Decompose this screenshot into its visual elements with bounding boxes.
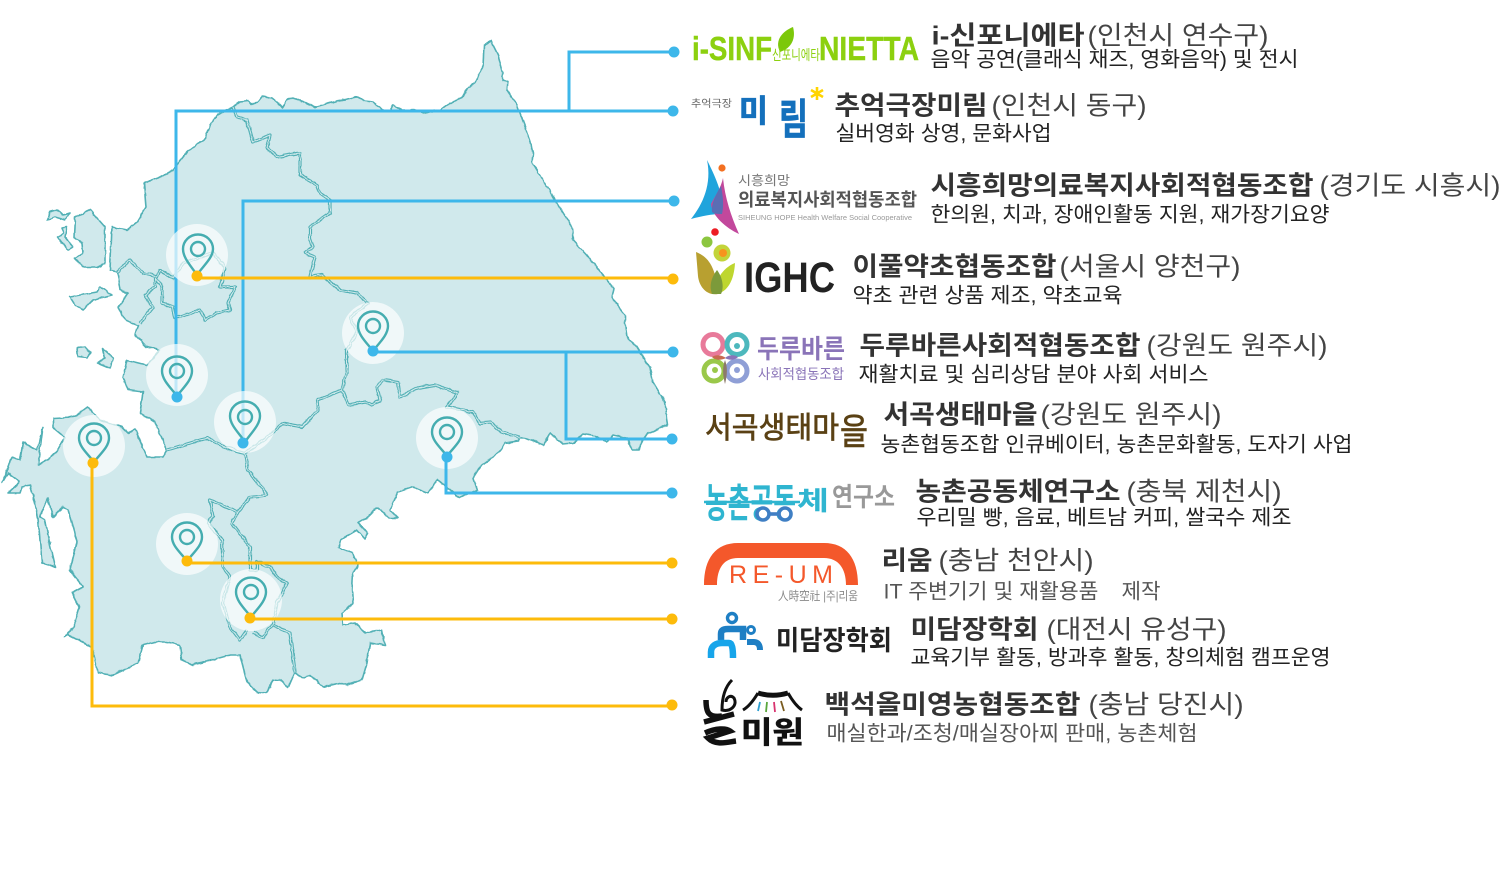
entry 1 text: (인천시 연수구) bbox=[1088, 20, 1268, 50]
pin: Siheung bbox=[230, 402, 260, 442]
entry 4 text: (서울시 양천구) bbox=[1060, 252, 1240, 282]
logo: 미림 bbox=[691, 87, 823, 143]
blue connector lines behind markers bbox=[176, 52, 674, 443]
entry 8 text: IT 주변기기 및 재활용품 bbox=[884, 580, 1098, 604]
entry 10 text: 백석올미영농협동조합 bbox=[824, 690, 1081, 720]
marker halos bbox=[63, 224, 478, 631]
entry 4 text: 약초 관련 상품 제조, 약초교육 bbox=[852, 284, 1122, 308]
logo: 농촌공동체 연구소: 체 bbox=[797, 486, 829, 516]
logo: i-SINFONIETTA: 신포니에타 bbox=[772, 47, 820, 63]
logo: i-SINFONIETTA: i-SINF bbox=[692, 30, 772, 67]
entry 3 text: 한의원, 치과, 장애인활동 지원, 재가장기요양 bbox=[930, 204, 1330, 226]
pin: Cheonan bbox=[172, 522, 202, 561]
logo: 시흥희망: SIHEUNG HOPE Health Welfare Social Cooperative bbox=[738, 215, 912, 222]
entry 6 text: 서곡생태마을 bbox=[884, 400, 1038, 430]
logo: 서곡생태마을: 을 bbox=[840, 411, 868, 452]
logo: 미림: 림 bbox=[779, 96, 808, 143]
logo: RE-UM bbox=[704, 543, 858, 603]
entry 8 text: (충남 천안시) bbox=[938, 546, 1094, 576]
logo: RE-UM: RE-UM bbox=[729, 561, 833, 589]
logo: 미림: 미 bbox=[739, 94, 768, 129]
entry 8 text: 제작 bbox=[1122, 580, 1160, 604]
logo: 올미원: 미원 bbox=[741, 717, 804, 750]
logo: 서곡생태마을: 서곡생태마 bbox=[705, 412, 839, 445]
entry 1 text: i-신포니에타 bbox=[932, 20, 1085, 50]
logo: 미담장학회: 미담장학회 bbox=[776, 626, 892, 656]
entry 8 text bbox=[882, 546, 1160, 604]
entry 2 text: (인천시 동구) bbox=[992, 90, 1146, 120]
entry 2 text: 실버영화 상영, 문화사업 bbox=[836, 122, 1052, 146]
islands bbox=[47, 210, 113, 368]
entry 3 text: 시흥희망의료복지사회적협동조합 bbox=[930, 170, 1314, 200]
entry 7 text bbox=[916, 476, 1292, 530]
entry 10 text: 매실한과/조청/매실장아찌 판매, 농촌체험 bbox=[826, 722, 1198, 746]
pin: Seoul Yangcheon bbox=[183, 234, 213, 275]
entry 7 text: 우리밀 빵, 음료, 베트남 커피, 쌀국수 제조 bbox=[916, 506, 1292, 530]
logo: 농촌공동체 연구소: 연구소 bbox=[832, 482, 895, 512]
connector lines in front of halos bbox=[92, 278, 674, 706]
entry 7 text: 농촌공동체연구소 bbox=[916, 476, 1120, 506]
entry 6 text: (강원도 원주시) bbox=[1040, 400, 1222, 430]
entry 3 text bbox=[930, 170, 1500, 226]
connector end dots bbox=[88, 46, 680, 710]
entry 9 text: (대전시 유성구) bbox=[1046, 614, 1226, 644]
logo: 미담장학회 bbox=[711, 614, 892, 658]
entry 2 text bbox=[834, 90, 1146, 146]
logo: 미림: 추억극장 bbox=[691, 98, 732, 110]
entry 9 text: 교육기부 활동, 방과후 활동, 창의체험 캠프운영 bbox=[910, 646, 1330, 670]
entry 5 text: 두루바른사회적협동조합 bbox=[860, 330, 1141, 360]
pin: Daejeon bbox=[236, 578, 266, 617]
logo: IGHC: IGHC bbox=[744, 254, 835, 302]
logo: 두루바른: 두루바른 bbox=[757, 334, 845, 364]
logo: i-SINFONIETTA bbox=[692, 27, 919, 67]
entry 2 text: 추억극장미림 bbox=[834, 90, 988, 120]
logo: 두루바른: 사회적협동조합 bbox=[758, 366, 844, 382]
entry 5 text: 재활치료 및 심리상담 분야 사회 서비스 bbox=[858, 364, 1208, 386]
logo: 서곡생태마을 bbox=[705, 411, 868, 452]
entry 4 text: 이풀약초협동조합 bbox=[852, 252, 1057, 282]
pin: Jecheon bbox=[432, 418, 462, 456]
entry 1 text: 음악 공연(클래식 재즈, 영화음악) 및 전시 bbox=[930, 48, 1298, 72]
pin: Incheon bbox=[162, 356, 192, 396]
provincial boundaries bbox=[117, 107, 520, 672]
pin: Dangjin bbox=[79, 424, 109, 462]
entry 6 text: 농촌협동조합 인큐베이터, 농촌문화활동, 도자기 사업 bbox=[880, 434, 1352, 456]
entry 3 text: (경기도 시흥시) bbox=[1320, 170, 1500, 200]
logo: 농촌공동체 연구소: 농촌공동 bbox=[705, 482, 796, 526]
entry 5 text bbox=[858, 330, 1328, 386]
logo: 두루바른 bbox=[703, 334, 845, 384]
entry 1 text bbox=[930, 20, 1298, 72]
entry 10 text: (충남 당진시) bbox=[1088, 690, 1244, 720]
mainland bbox=[2, 41, 668, 693]
entry 8 text: 리움 bbox=[882, 546, 932, 576]
entry 9 text: 미담장학회 bbox=[910, 614, 1038, 644]
entry 5 text: (강원도 원주시) bbox=[1146, 330, 1328, 360]
logo: 시흥희망: 의료복지사회적협동조합 bbox=[738, 190, 917, 210]
map of central Korea bbox=[2, 41, 668, 693]
pin: Wonju bbox=[358, 312, 388, 351]
entry 4 text bbox=[852, 252, 1240, 308]
logo: IGHC bbox=[696, 228, 835, 302]
entry 10 text bbox=[824, 690, 1244, 746]
entry 9 text bbox=[910, 614, 1330, 670]
logo: 올미원 bbox=[704, 680, 804, 750]
logo: RE-UM: 人時空社 |주|리움 bbox=[778, 589, 858, 603]
logo: 시흥희망: 시흥희망 bbox=[738, 173, 790, 188]
entry 6 text bbox=[880, 400, 1352, 456]
location pins bbox=[79, 234, 462, 617]
entry 7 text: (충북 제천시) bbox=[1126, 476, 1282, 506]
logo: i-SINFONIETTA: NIETTA bbox=[819, 30, 919, 67]
logo: 시흥희망 bbox=[691, 160, 917, 234]
